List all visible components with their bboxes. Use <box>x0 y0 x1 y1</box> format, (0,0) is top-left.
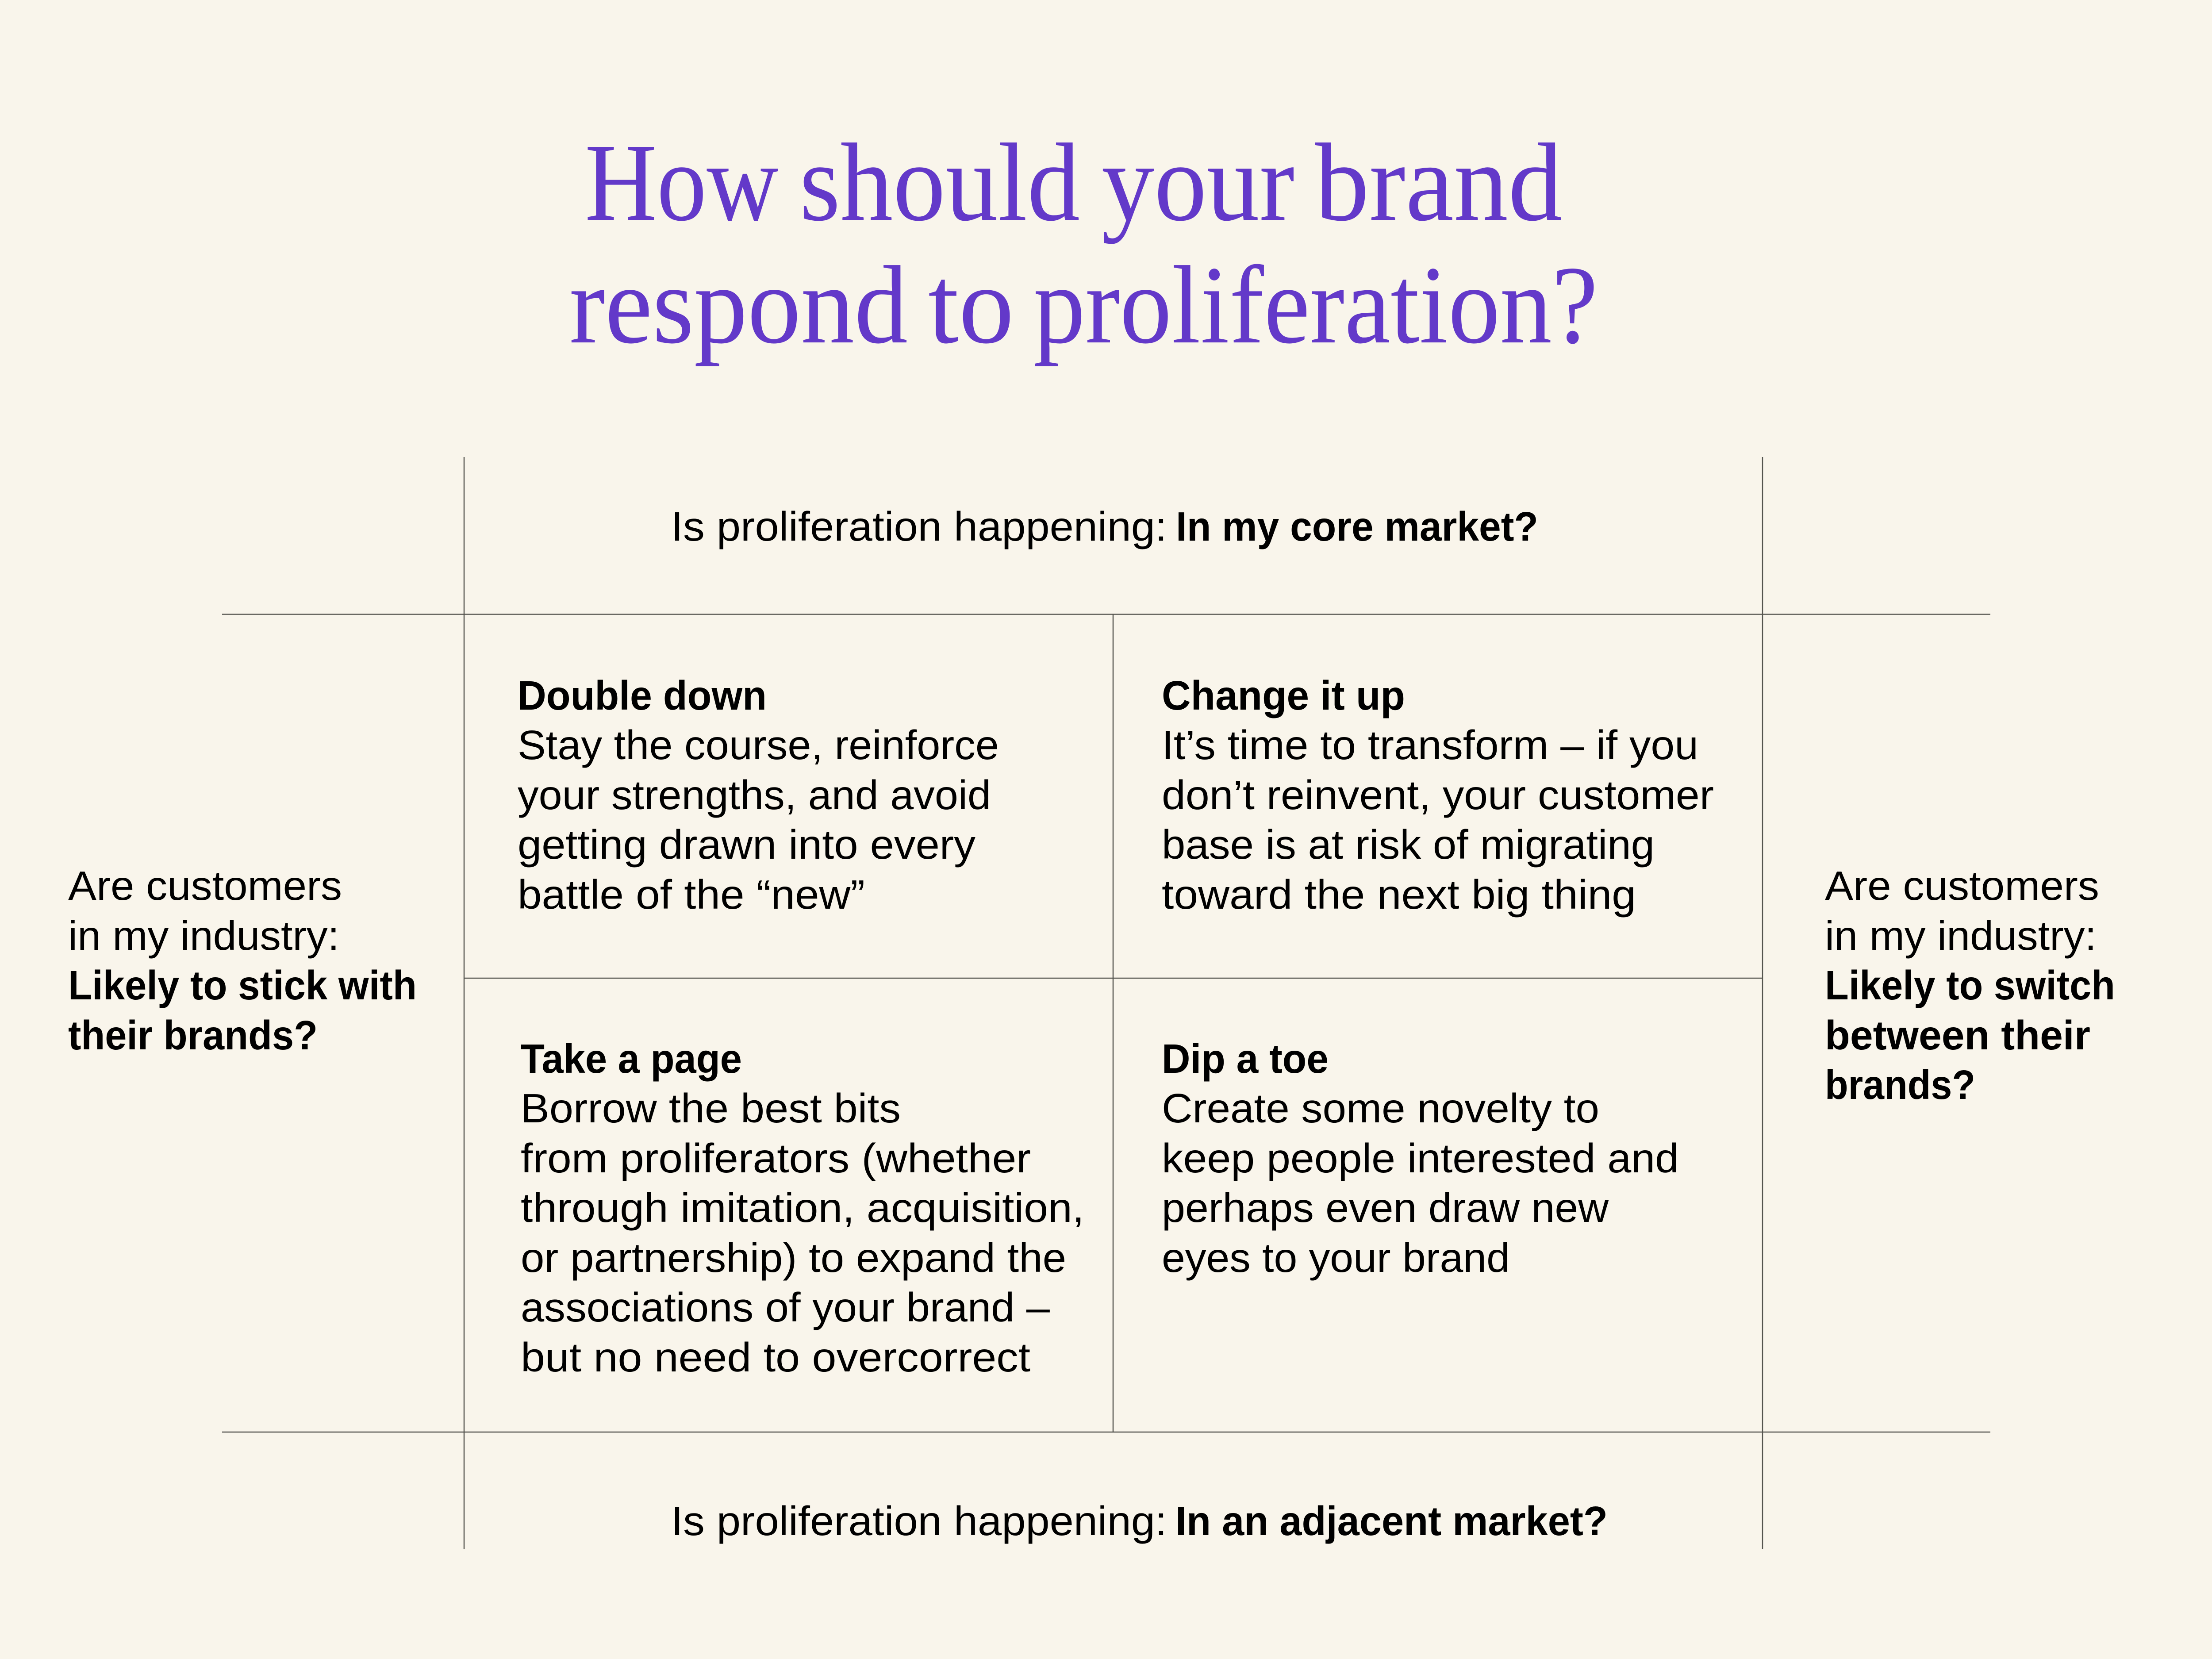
left axis label: likely to stick: in my industry: <box>68 913 339 959</box>
quadrant: dip a toe <box>1162 1036 1679 1281</box>
title: respond <box>569 243 908 367</box>
quadrant: take a page: from proliferators (whether <box>521 1135 1031 1181</box>
title: brand <box>1315 120 1563 244</box>
quadrant: dip a toe: perhaps even draw new <box>1162 1185 1609 1231</box>
right axis label: likely to switch: between their <box>1825 1012 2090 1058</box>
quadrant: double down: Stay the course, reinforce <box>518 722 999 768</box>
quadrant: change it up <box>1162 672 1714 918</box>
left axis label: likely to stick: their brands? <box>68 1012 318 1058</box>
quadrant: double down: battle of the “new” <box>518 872 865 918</box>
quadrant: dip a toe: eyes to your brand <box>1162 1235 1510 1281</box>
quadrant: double down: getting drawn into every <box>518 822 976 868</box>
quadrant: double down: Double down <box>518 672 767 718</box>
bottom axis label: adjacent market <box>671 1498 1608 1544</box>
quadrant: take a page: Take a page <box>521 1036 742 1082</box>
quadrant: take a page: associations of your brand – <box>521 1284 1050 1330</box>
quadrant: change it up: don’t reinvent, your customer <box>1162 772 1714 818</box>
quadrant: dip a toe: Create some novelty to <box>1162 1085 1599 1131</box>
right axis label: likely to switch: Likely to switch <box>1825 962 2115 1008</box>
right axis label: likely to switch: brands? <box>1825 1062 1975 1108</box>
right axis label: likely to switch <box>1825 863 2115 1108</box>
left axis label: likely to stick: Likely to stick with <box>68 962 417 1008</box>
title <box>569 120 1598 367</box>
quadrant: take a page: Borrow the best bits <box>521 1085 901 1131</box>
quadrant: take a page: through imitation, acquisition, <box>521 1185 1084 1231</box>
quadrant: change it up: Change it up <box>1162 672 1405 718</box>
top axis label: core market: In my core market? <box>1176 503 1538 549</box>
left axis label: likely to stick: Are customers <box>68 863 342 909</box>
title: should <box>799 120 1080 244</box>
title: to <box>928 243 1014 367</box>
quadrant: change it up: base is at risk of migrating <box>1162 822 1655 868</box>
quadrant: dip a toe: keep people interested and <box>1162 1135 1679 1181</box>
bottom axis label: adjacent market: In an adjacent market? <box>1175 1498 1608 1544</box>
right axis label: likely to switch: Are customers <box>1825 863 2099 909</box>
quadrant: change it up: It’s time to transform – if you <box>1162 722 1698 768</box>
matrix grid lines <box>222 457 1990 1549</box>
left axis label: likely to stick <box>68 863 417 1058</box>
title: your <box>1102 120 1294 244</box>
quadrant: double down: your strengths, and avoid <box>518 772 991 818</box>
quadrant: take a page: but no need to overcorrect <box>521 1334 1030 1380</box>
quadrant: take a page: or partnership) to expand the <box>521 1235 1066 1281</box>
quadrant: take a page <box>521 1036 1084 1380</box>
quadrant: change it up: toward the next big thing <box>1162 872 1636 918</box>
bottom axis label: adjacent market: Is proliferation happening: <box>671 1498 1167 1544</box>
quadrant: double down <box>518 672 999 918</box>
title: How <box>585 120 779 244</box>
quadrant: dip a toe: Dip a toe <box>1162 1036 1329 1082</box>
top axis label: core market <box>671 503 1538 549</box>
title: proliferation? <box>1033 243 1598 367</box>
top axis label: core market: Is proliferation happening: <box>671 503 1167 549</box>
right axis label: likely to switch: in my industry: <box>1825 913 2097 959</box>
